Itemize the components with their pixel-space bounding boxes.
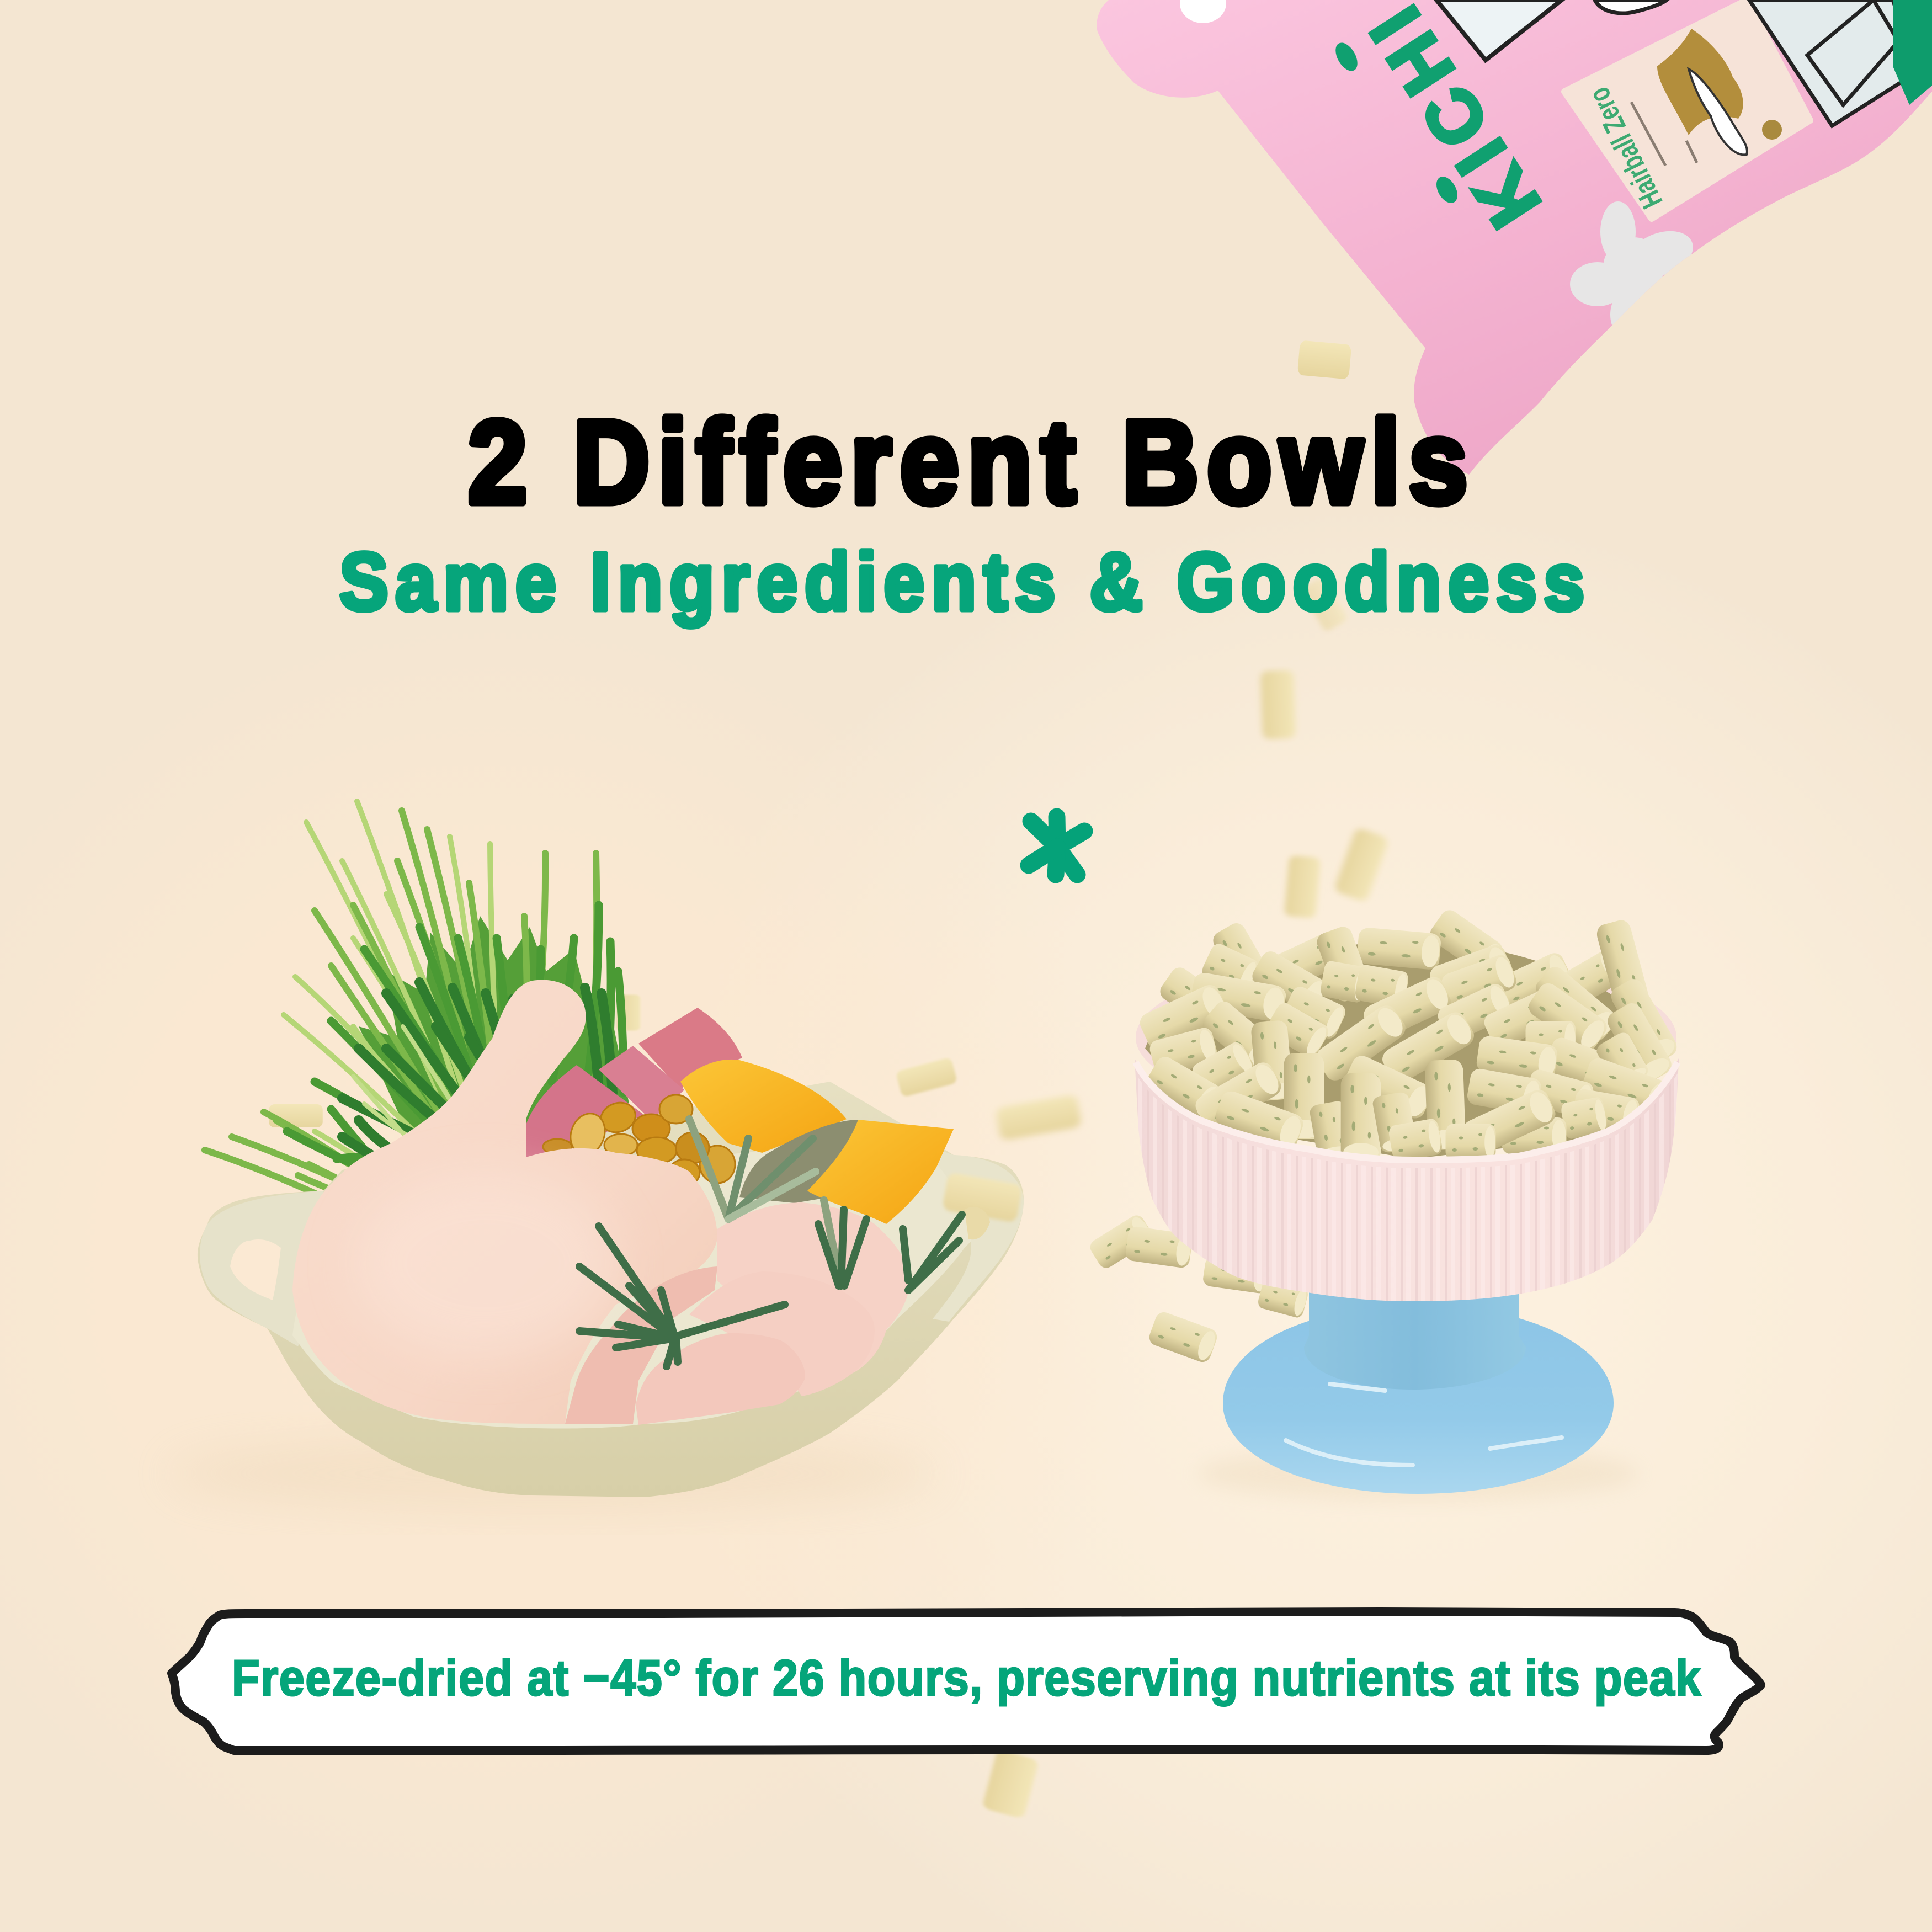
bowl interior [292,1137,999,1429]
grass mass [359,916,629,1159]
scattered treats on the floor [269,994,1310,1364]
treat pile backing [1145,938,1669,1159]
bag window illustration [1436,0,1562,60]
tuna slices [520,1008,742,1159]
bowl left handle hole [230,1239,281,1300]
pink ribbed bowl [1135,1058,1679,1301]
bag letter dots [1331,39,1462,207]
pumpkin wedge back [680,1060,847,1153]
title: 2 Different Bowls [468,397,1468,528]
wheatgrass [205,801,629,1217]
blue base disc [1223,1305,1614,1494]
subtitle: Same Ingredients & Goodness [339,536,1584,627]
label small print [1631,102,1697,166]
label cat [1689,69,1747,155]
treat pile [1137,907,1680,1163]
bowl right rim [886,1120,1024,1322]
thigh and drumstick [292,980,717,1424]
right bowl with treats [1135,907,1680,1501]
label small ball [1762,120,1782,140]
bag cat doodle [1595,0,1667,13]
fish oil capsules [543,1095,735,1186]
right bowl shadow [1197,1446,1639,1501]
chicken breast lower [636,1333,805,1425]
pumpkin wedge front [739,1120,954,1224]
chicken breast upper [717,1202,909,1380]
callout banner [172,1611,1761,1750]
banner outline [172,1611,1761,1750]
label treat pile [1657,29,1743,135]
thigh highlight [353,1170,618,1358]
icon: green asterisk [1029,817,1084,875]
blue base highlights [1286,1384,1562,1465]
bag green panel [1893,0,1932,105]
label product name: Hairball Zero [1582,82,1669,214]
product bag pouring treats [1097,0,1932,475]
falling treats [982,340,1390,1819]
blue stem [1304,1286,1526,1390]
chicken breast middle [689,1271,875,1396]
bowl left handle rim [200,1191,331,1346]
banner text: Freeze-dried at −45° for 26 hours, preserving nutrients at its peak [232,1649,1701,1706]
rosemary sprigs [579,1119,962,1366]
bag ear highlight [1180,0,1226,23]
bowl body [198,1082,1024,1497]
bowl back interior [1136,955,1676,1120]
left bowl shadow [166,1435,938,1512]
bag cabinet illustration [1749,0,1918,126]
pellet resting in bowl [942,1172,1023,1223]
bag flower [1570,201,1693,326]
bowl right handle hole [965,1207,990,1239]
bowl rim highlight [1136,1062,1678,1160]
chicken breast piece dark [565,1266,717,1424]
bag body [1097,0,1932,475]
bag label card [1564,0,1810,219]
bowl ribs [1136,1073,1678,1301]
bag brand name: KICHI [1354,0,1556,242]
left bowl with raw ingredients [166,801,1024,1512]
